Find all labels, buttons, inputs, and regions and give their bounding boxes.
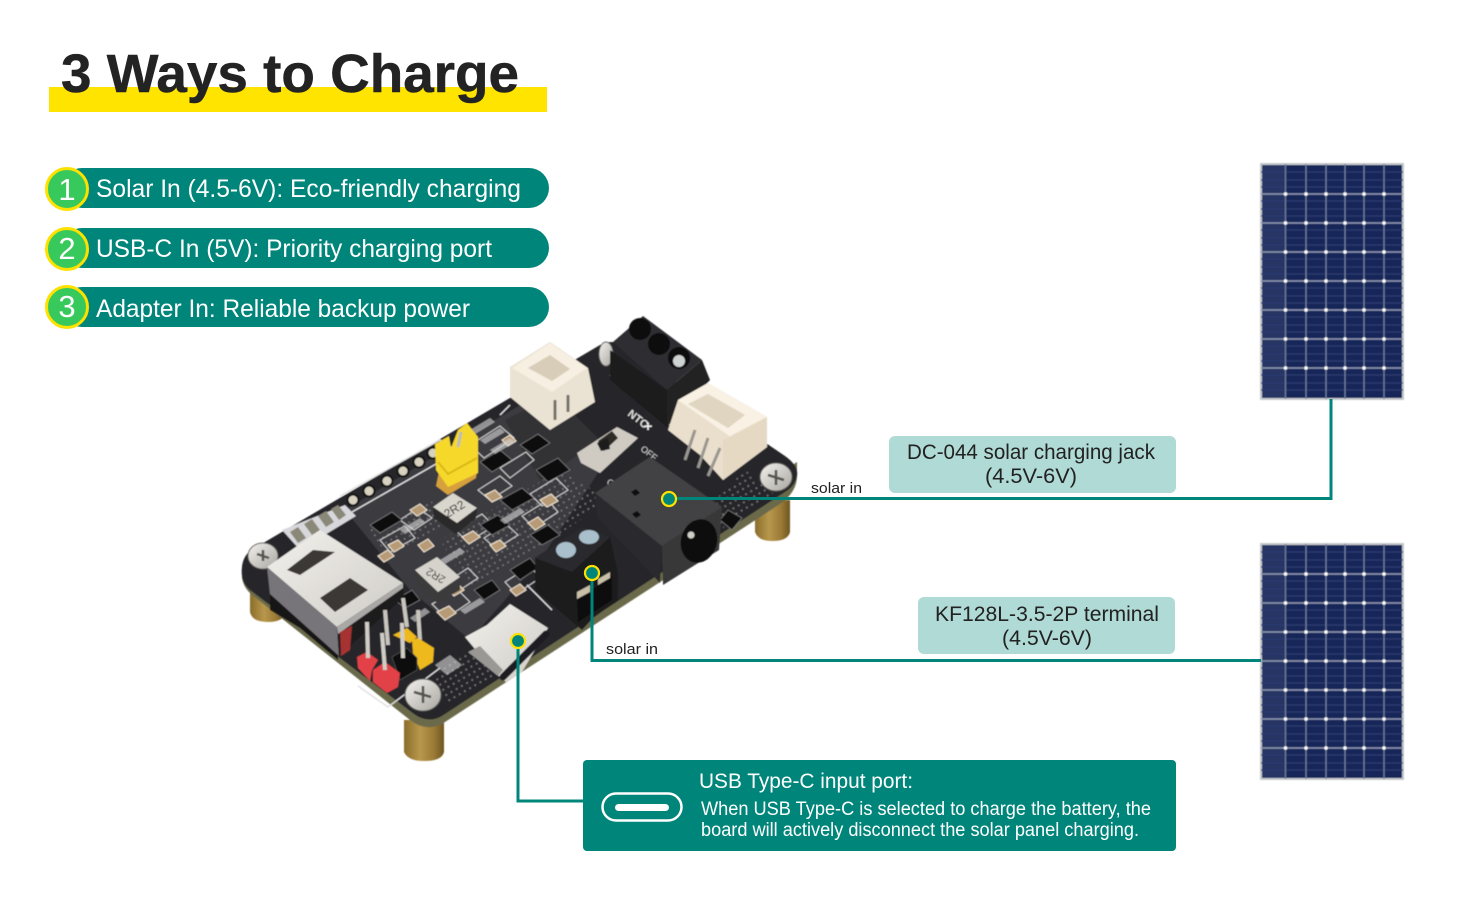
info body: [701, 799, 1151, 841]
silkscreen labels: +: [644, 418, 653, 435]
silkscreen labels: OFF: [639, 444, 660, 463]
circuit board photo: [242, 316, 797, 761]
list item 1: solar in: [46, 168, 549, 210]
usb-a port: [267, 530, 404, 660]
small smd components: [370, 418, 742, 675]
title highlight bar: [49, 87, 547, 112]
info body: board will actively disconnect the solar panel charging.: [701, 820, 1139, 841]
callout: dc jack label: (4.5V-6V): [985, 465, 1077, 488]
list item 1: solar in: 1: [58, 172, 76, 207]
inductor lower: [415, 557, 460, 603]
callout: terminal label: KF128L-3.5-2P terminal: [935, 603, 1159, 626]
label: solar in bottom: solar in: [606, 641, 658, 658]
white 2-pin connector: [510, 342, 595, 430]
list item 2: usb-c in: USB-C In (5V): Priority charging port: [96, 235, 492, 263]
connector: terminal to solar panel: [592, 573, 1261, 660]
title: 3 Ways to Charge: [61, 44, 519, 104]
black 3-way terminal block: [610, 316, 710, 427]
usb-c port: [465, 604, 548, 682]
list item 3: adapter in: 3: [58, 289, 76, 324]
info heading: USB Type-C input port:: [699, 769, 913, 793]
inductor lower: 2R2: [424, 565, 448, 585]
list item 3: adapter in: Adapter In: Reliable backup power: [96, 295, 470, 323]
inductor 2R2: 2R2: [441, 497, 468, 521]
list item 2: usb-c in: [46, 228, 549, 270]
header holes row: [348, 448, 438, 506]
list item 3: adapter in: [46, 286, 549, 328]
inductor 2R2: [433, 493, 477, 534]
brass standoffs: [250, 500, 790, 761]
board edge: [242, 462, 797, 727]
silkscreen lines: [340, 375, 670, 707]
dc jack: [595, 457, 722, 585]
callout: terminal label: [918, 597, 1175, 654]
black 2-way terminal block: [535, 527, 618, 630]
connector: dc jack to solar panel: [669, 399, 1331, 498]
marker: usb-c: [511, 634, 525, 648]
list item 2: usb-c in: 2: [58, 231, 76, 266]
yellow jumper: [435, 423, 478, 495]
callout: dc jack label: [889, 436, 1176, 493]
white 3-pin connector: [668, 383, 767, 480]
connector: usb-c to info box: [518, 641, 583, 801]
corner screws: [248, 342, 792, 711]
switch: [577, 427, 638, 473]
list item 1: solar in: Solar In (4.5-6V): Eco-friendly charging: [96, 175, 521, 203]
callout: terminal label: (4.5V-6V): [1002, 627, 1092, 650]
panel: solar panel top: [1261, 164, 1403, 399]
info body: When USB Type-C is selected to charge the battery, the: [701, 799, 1151, 820]
led row: [282, 505, 356, 550]
callout: dc jack label: DC-044 solar charging jack: [907, 441, 1155, 464]
marker: terminal: [585, 566, 599, 580]
board top surface: [242, 342, 797, 720]
silkscreen labels: NTC: [625, 408, 650, 431]
pcb lighter mid-section and via texture: [345, 395, 775, 705]
marker: dc jack: [662, 492, 676, 506]
label: solar in top: solar in: [811, 480, 862, 497]
pin headers: [357, 598, 434, 693]
panel: solar panel bottom: [1261, 544, 1403, 779]
silkscreen labels: ON: [605, 477, 622, 493]
panel: usb type-c info box: [583, 760, 1176, 851]
silkscreen labels: [605, 408, 660, 493]
icon: usb-c port: [602, 794, 682, 820]
